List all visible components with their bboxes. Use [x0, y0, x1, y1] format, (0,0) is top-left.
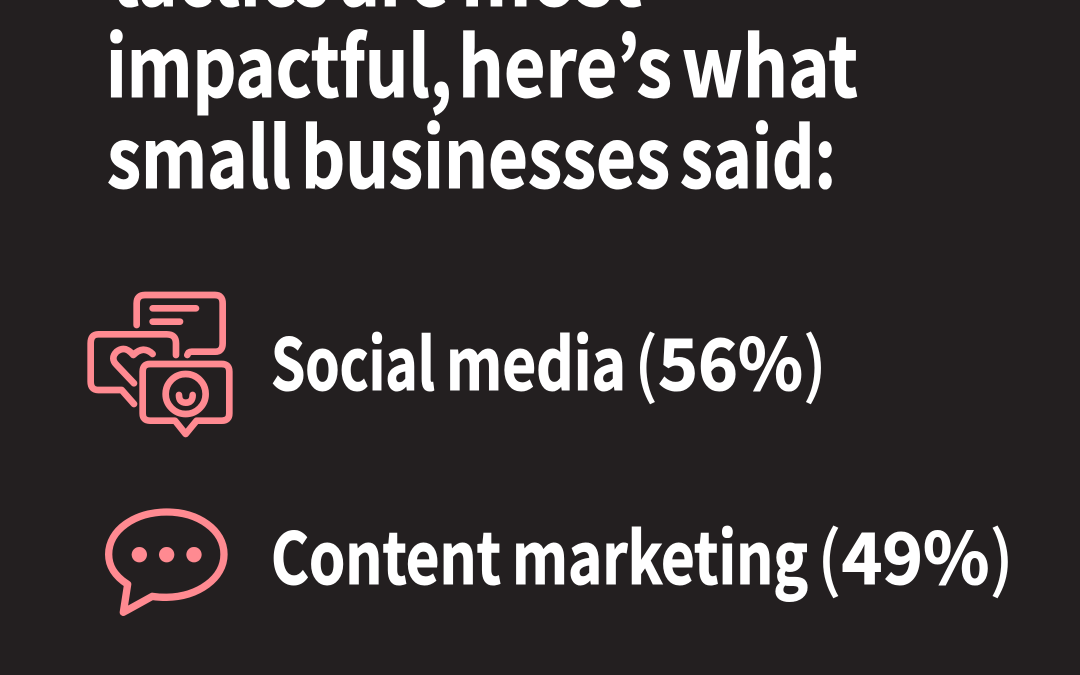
- heading: small: [107, 92, 291, 212]
- label: content marketing: marketing: [512, 503, 808, 605]
- label: content marketing: (49%): [817, 503, 1014, 605]
- label: content marketing: Content: [271, 503, 501, 605]
- label: social media: (56%): [634, 309, 827, 411]
- heading: said:: [680, 92, 836, 212]
- heading: [106, 0, 858, 212]
- icon: social media chat bubbles: [91, 295, 229, 434]
- heading: what: [682, 1, 858, 121]
- heading: impactful,: [106, 1, 452, 121]
- label: content marketing: [271, 503, 1014, 605]
- label: social media: Social: [271, 309, 435, 411]
- icon: speech bubble with dots: [109, 512, 224, 612]
- heading: here’s: [458, 1, 672, 121]
- label: social media: media: [446, 309, 626, 411]
- label: social media: [271, 309, 827, 411]
- heading: businesses: [301, 92, 670, 212]
